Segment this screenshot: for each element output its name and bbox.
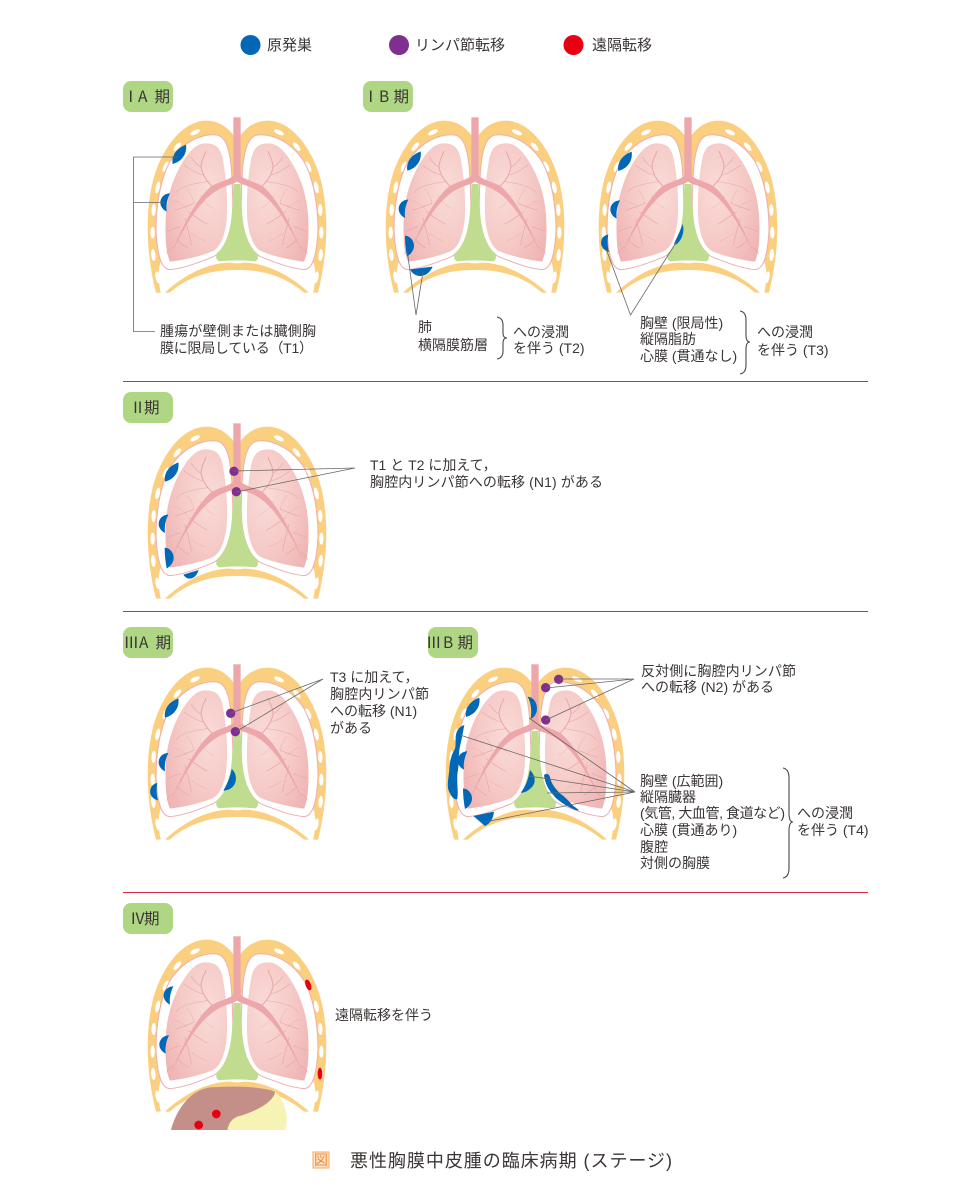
badge: IA: A <box>138 85 148 107</box>
badge: IIIA: Ⅲ <box>124 631 139 653</box>
divider <box>123 611 868 612</box>
badge: IV <box>123 903 173 934</box>
text T4 <box>797 805 869 838</box>
text N1: 胸腔内リンパ節への転移 (N1) がある <box>370 474 603 490</box>
panel: stage IB left <box>363 81 585 359</box>
divider <box>123 381 868 382</box>
legend: lymph node metastasis: リンパ節転移 <box>415 37 505 54</box>
legend: primary tumor <box>240 35 312 55</box>
badge: II <box>123 392 173 423</box>
panel: stage II <box>123 392 603 599</box>
badge: IIIA <box>123 627 173 658</box>
chest diagram IB T2 <box>386 117 564 293</box>
text IIIA: への転移 (N1) <box>330 703 417 719</box>
text T2 <box>513 324 585 356</box>
badge: IA <box>123 81 173 112</box>
badge: II: Ⅱ <box>130 396 146 418</box>
legend: distant metastasis: 遠隔転移 <box>592 37 652 54</box>
text T1: 膜に限局している（T1） <box>160 340 313 356</box>
text N2: 反対側に胸腔内リンパ節 <box>641 663 796 679</box>
text T1: 腫瘍が壁側または臓側胸 <box>160 323 316 339</box>
chest diagram IB T3 <box>599 117 777 293</box>
badge: IIIB <box>426 627 478 658</box>
text lung and diaphragm: 横隔膜筋層 <box>418 337 488 353</box>
chest diagram IV <box>148 936 326 1130</box>
caption title: 悪性胸膜中皮腫の臨床病期 (ステージ) <box>350 1151 672 1171</box>
badge: IIIB: Ⅲ <box>426 631 442 653</box>
badge: IB: 期 <box>394 85 409 107</box>
text T4 organs <box>640 773 785 871</box>
text T4 organs: 心膜 (貫通あり) <box>640 822 737 838</box>
caption <box>313 1151 672 1171</box>
text T1 <box>160 323 316 356</box>
chest diagram IIIB <box>446 664 624 840</box>
text T3: を伴う (T3) <box>757 342 829 358</box>
leader lines IIIA <box>231 679 323 732</box>
panel: stage IB right <box>599 117 829 374</box>
text T4 organs: 対側の胸膜 <box>640 855 710 871</box>
badge: IIIB: 期 <box>458 631 473 653</box>
text IIIA <box>330 669 429 736</box>
chest diagram II <box>148 423 326 599</box>
badge: IA: Ⅰ <box>123 85 139 107</box>
text IIIA: T3 に加えて， <box>330 669 419 685</box>
caption figure mark: 図 <box>314 1152 328 1168</box>
text N1 <box>370 457 603 490</box>
legend: primary tumor: 原発巣 <box>267 37 312 54</box>
brace T3 <box>740 311 750 374</box>
badge: IB: Ⅰ <box>363 85 379 107</box>
leader lines T4 <box>460 718 635 822</box>
text T4 organs: 胸壁 (広範囲) <box>640 773 723 789</box>
text distant metastasis: 遠隔転移を伴う <box>335 1007 433 1023</box>
leader lines IA <box>134 157 178 332</box>
text T3 <box>757 324 829 358</box>
text N2 <box>641 663 796 695</box>
badge: IA: 期 <box>154 85 170 107</box>
text T4: への浸潤 <box>797 805 853 821</box>
text T3 organs: 心膜 (貫通なし) <box>640 348 737 364</box>
leader lines T2 <box>408 253 423 315</box>
badge: IB: B <box>379 85 389 107</box>
legend: lymph node metastasis <box>389 35 505 55</box>
legend: distant metastasis <box>564 35 652 55</box>
chest diagram IA <box>148 117 326 293</box>
panel: stage IV <box>123 903 433 1130</box>
text IIIA: がある <box>330 720 372 736</box>
badge: IV: Ⅳ <box>130 907 146 929</box>
text T3: への浸潤 <box>757 324 813 340</box>
text lung and diaphragm <box>418 319 488 353</box>
badge: IIIB: B <box>443 631 453 653</box>
text lung and diaphragm: 肺 <box>418 319 432 335</box>
chest diagram IIIA <box>148 664 326 840</box>
text N2: への転移 (N2) がある <box>641 679 774 695</box>
text T3 organs <box>640 315 737 364</box>
legend <box>240 35 652 55</box>
text T4 organs: 腹腔 <box>640 839 668 855</box>
text T4: を伴う (T4) <box>797 822 869 838</box>
text N1: T1 と T2 に加えて， <box>370 457 497 473</box>
text T4 organs: 縦隔臓器 <box>640 789 696 805</box>
brace T2 <box>497 317 507 359</box>
divider <box>123 892 868 893</box>
badge: II: 期 <box>144 396 160 418</box>
text T3 organs: 縦隔脂肪 <box>640 331 696 347</box>
badge: IIIA: A <box>139 631 149 653</box>
panel: stage IA <box>123 81 326 356</box>
text T2: への浸潤 <box>513 324 569 340</box>
badge: IIIA: 期 <box>156 631 171 653</box>
text IIIA: 胸腔内リンパ節 <box>330 686 429 702</box>
text T3 organs: 胸壁 (限局性) <box>640 315 723 331</box>
panel: stage IIIA <box>123 627 429 840</box>
panel: stage IIIB <box>426 627 869 878</box>
badge: IB <box>363 81 413 112</box>
leader lines T3 <box>606 241 677 315</box>
leader lines N1 <box>234 468 355 492</box>
badge: IV: 期 <box>144 907 160 929</box>
text T2: を伴う (T2) <box>513 340 585 356</box>
brace T4 <box>783 768 793 878</box>
text T4 organs: (気管, 大血管, 食道など) <box>640 805 785 821</box>
leader lines N2 <box>546 679 634 720</box>
